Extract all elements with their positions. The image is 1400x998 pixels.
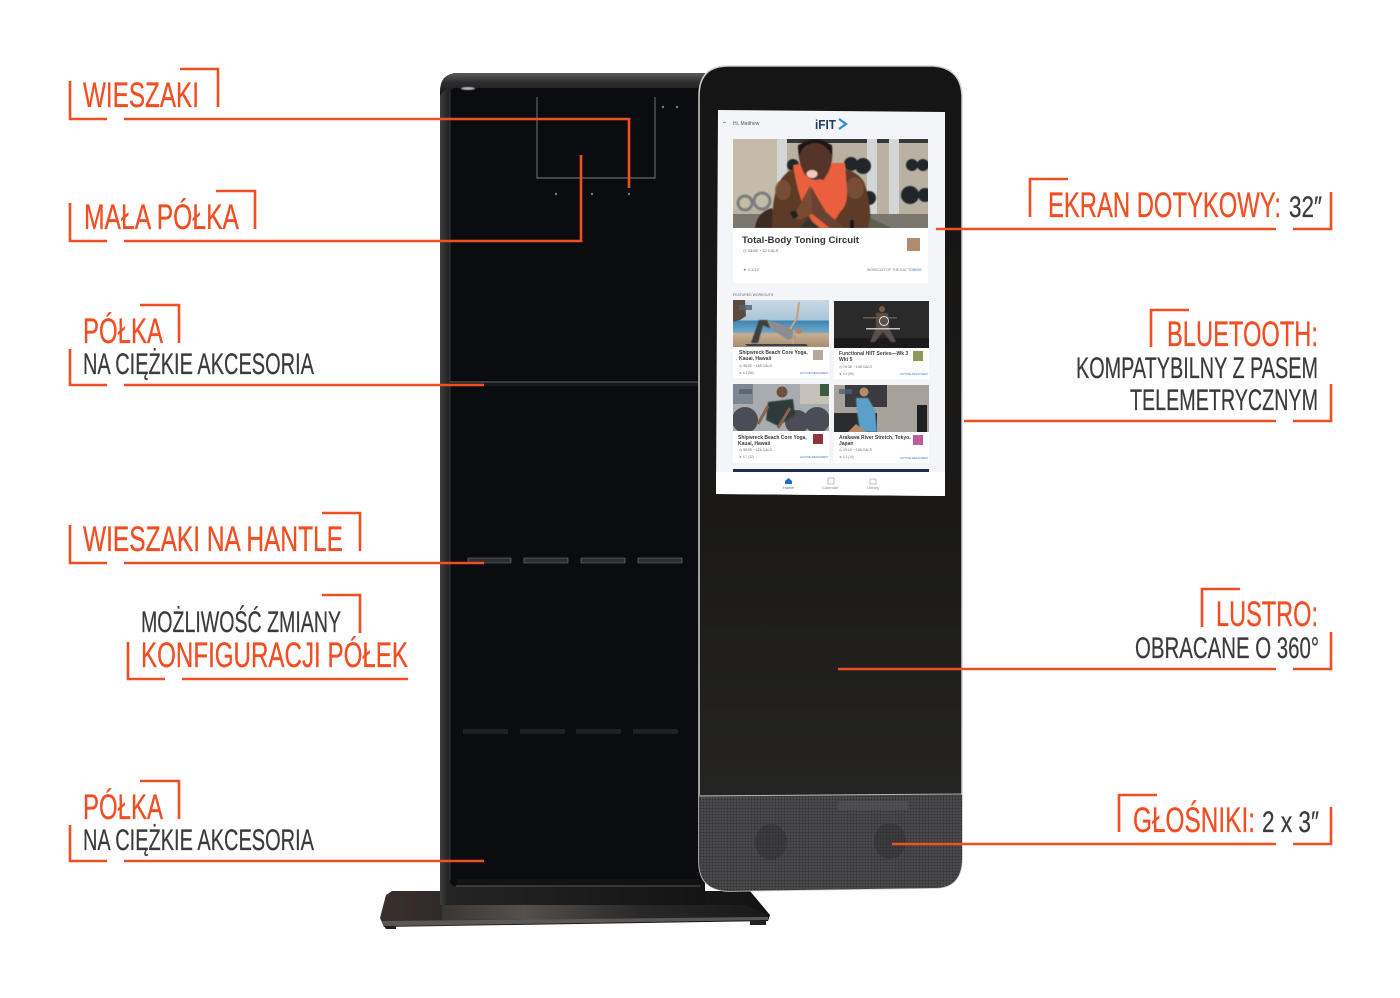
bottom navigation: Library <box>867 485 879 490</box>
workout tile: stretch: ★ 4.3 (14) <box>839 455 854 459</box>
callout: ekran dotykowy: 32″ <box>1289 191 1322 224</box>
callout: wieszaki: WIESZAKI <box>83 76 199 115</box>
screen header: Hi, Matthew <box>733 121 760 127</box>
workout tile: beach: Shipwreck Beach Core Yoga, <box>739 350 808 356</box>
callout: ekran dotykowy: EKRAN DOTYKOWY: <box>1048 186 1281 225</box>
dumbbell hangers lower row <box>463 729 678 734</box>
callout: lustro: LUSTRO: <box>1216 595 1318 634</box>
workout tile: gym balls: ★ 4.7 (32) <box>739 455 754 459</box>
workout tile: beach: Kauai, Hawaii <box>739 356 772 362</box>
workout tile: gym balls: Shipwreck Beach Core Yoga, <box>738 435 807 441</box>
callout: konfiguracja półek: KONFIGURACJI PÓŁEK <box>141 636 408 675</box>
callout: mała półka <box>70 155 581 241</box>
callout: głośniki <box>892 795 1331 844</box>
section label: FEATURED WORKOUTS <box>733 293 774 297</box>
workout tile: stretch: ◷ 10:10 ◔ 106 CALS <box>839 448 872 452</box>
speaker grille <box>699 794 963 892</box>
callout: lustro <box>838 589 1331 669</box>
screen header: iFIT <box>815 117 836 132</box>
workout tile: beach: ◷ 36:00 ◔ 195 CALS <box>739 364 772 368</box>
workout tile: dark studio: Wkt 5 <box>839 357 853 363</box>
callout: półka górna: NA CIĘŻKIE AKCESORIA <box>83 348 314 381</box>
workout tile: gym balls: ACTIVE RECOVERY <box>800 455 828 459</box>
workout tile: beach: ★ 4.1 (56) <box>739 371 754 375</box>
callout: półka dolna: NA CIĘŻKIE AKCESORIA <box>83 824 314 857</box>
workout tile: stretch: ACTIVE RECOVERY <box>900 456 928 460</box>
callout: półka dolna: PÓŁKA <box>83 788 163 827</box>
callout: półka dolna <box>70 781 484 861</box>
callout: wieszaki na hantle <box>70 513 484 563</box>
callout: półka górna: PÓŁKA <box>83 312 163 351</box>
workout tile: dark studio: ★ 4.3 (59) <box>839 372 854 376</box>
callout: głośniki: 2 x 3″ <box>1262 806 1319 839</box>
callout: wieszaki <box>70 69 629 188</box>
callout: mała półka: MAŁA PÓŁKA <box>84 198 239 237</box>
bottom navigation: Calendar <box>822 485 839 490</box>
callout: lustro: OBRACANE O 360° <box>1135 632 1319 665</box>
hero workout card: ◷ 33:08 ◔ 32 CALS <box>743 248 779 253</box>
hero workout card: Total-Body Toning Circuit <box>742 235 860 246</box>
workout tile: stretch: Japan <box>839 441 853 447</box>
workout tile: dark studio: ◷ 19:38 ◔ 145 CALS <box>839 365 872 369</box>
hanger pegs <box>555 106 678 195</box>
workout tile: stretch <box>834 385 929 463</box>
callout: głośniki: GŁOŚNIKI: <box>1133 800 1255 840</box>
hero workout card: ★ 4 1/10 <box>743 267 760 272</box>
workout tile: dark studio: Functional HIIT Series—Wk 3 <box>839 351 908 357</box>
workout tile: beach <box>733 300 829 378</box>
workout tile: dark studio: ACTIVE RECOVERY <box>900 372 928 376</box>
workout tile: stretch: Arakawa River Stretch, Tokyo, <box>839 435 911 441</box>
infographic <box>68 65 1332 929</box>
dumbbell hangers upper row <box>468 558 682 563</box>
workout tile: gym balls: Kauai, Hawaii <box>738 441 771 447</box>
callout: konfiguracja półek: MOŻLIWOŚĆ ZMIANY <box>141 605 341 639</box>
bottom navigation: Home <box>783 485 794 490</box>
callout: ekran dotykowy <box>936 179 1331 229</box>
hero workout card: TONING <box>908 268 922 272</box>
mirror panel <box>699 66 963 892</box>
storage tower <box>440 73 705 905</box>
callout: wieszaki na hantle: WIESZAKI NA HANTLE <box>83 520 343 559</box>
callout: bluetooth: BLUETOOTH: <box>1167 315 1318 354</box>
screen header <box>723 117 846 132</box>
heavy accessories shelf <box>450 382 698 386</box>
floor base <box>380 891 770 929</box>
next tile strip <box>733 469 929 472</box>
hero workout card <box>733 139 932 283</box>
bottom navigation <box>716 472 945 496</box>
workout tile: gym balls: ◷ 35:09 ◔ 126 CALS <box>739 448 772 452</box>
small shelf outline <box>537 97 655 178</box>
workout tile: gym balls <box>732 384 830 463</box>
callout: konfiguracja półek <box>128 595 408 679</box>
callout: bluetooth <box>964 310 1331 421</box>
touch screen <box>716 110 945 496</box>
hero workout card: WORKOUT OF THE DAY <box>867 268 908 272</box>
callout: półka górna <box>70 305 484 385</box>
workout tile: dark studio <box>834 301 929 379</box>
workout tile: beach: ACTIVE RECOVERY <box>800 371 828 375</box>
